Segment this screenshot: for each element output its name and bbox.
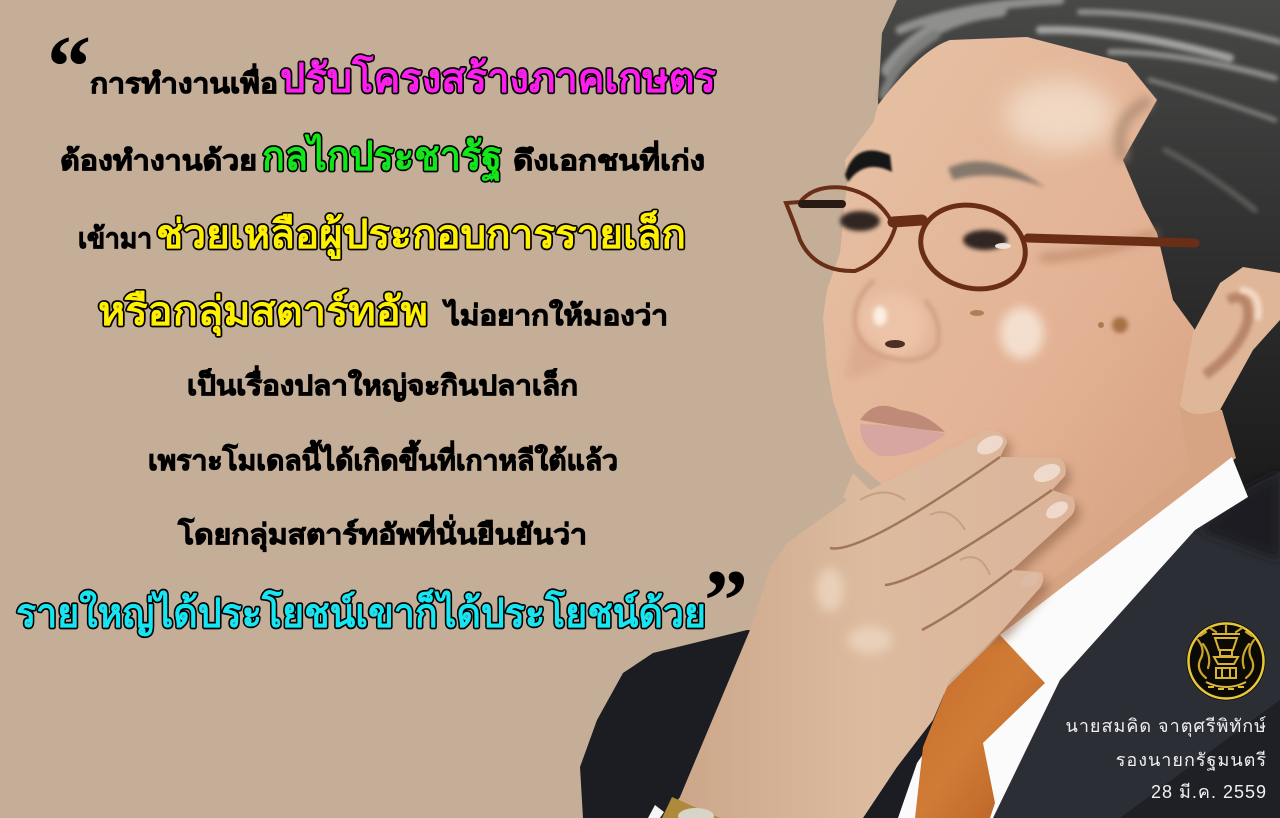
line 4 xyxy=(98,289,668,337)
quote text block xyxy=(16,19,748,650)
necktie xyxy=(915,635,1045,818)
line 1 xyxy=(90,55,717,101)
hand xyxy=(665,430,1075,818)
caption: speaker name, title and date: 28 มี.ค. 2559 xyxy=(1151,782,1267,802)
line 8: รายใหญ่ได้ประโยชน์เขาก็ได้ประโยชน์ด้วย xyxy=(16,588,706,637)
nose outline xyxy=(855,280,939,360)
closing quotation mark: ” xyxy=(704,553,748,650)
glasses xyxy=(786,187,1195,300)
lips xyxy=(860,406,946,456)
hair grey strands xyxy=(884,0,1280,210)
panel: portrait photo xyxy=(580,0,1280,818)
shirt collar xyxy=(898,457,1248,818)
ear xyxy=(1180,267,1280,414)
suit jacket left xyxy=(580,630,1000,818)
suit jacket right xyxy=(990,472,1280,818)
line 4: ไม่อยากให้มองว่า xyxy=(442,299,668,331)
wristwatch xyxy=(648,797,720,818)
finger creases xyxy=(830,457,1052,630)
line 1: การทำงานเพื่อ xyxy=(90,63,278,99)
hair xyxy=(878,0,1280,490)
seal urn xyxy=(1212,634,1240,678)
neck xyxy=(940,400,1236,640)
eyes xyxy=(840,211,1011,250)
fingernails xyxy=(974,432,1071,590)
caption: speaker name, title and date xyxy=(1066,716,1267,802)
line 3: เข้ามา xyxy=(78,223,152,254)
line 5: เป็นเรื่องปลาใหญ่จะกินปลาเล็ก xyxy=(187,365,578,402)
line 7: โดยกลุ่มสตาร์ทอัพที่นั่นยืนยันว่า xyxy=(177,514,587,552)
knuckle highlights xyxy=(816,568,892,654)
caption: speaker name, title and date: นายสมคิด จาตุศรีพิทักษ์ xyxy=(1066,716,1267,737)
face highlights and shadows xyxy=(845,80,1157,380)
line 6: เพราะโมเดลนี้ได้เกิดขึ้นที่เกาหลีใต้แล้ว xyxy=(148,439,618,476)
eyebrows xyxy=(845,150,1046,188)
line 4: หรือกลุ่มสตาร์ทอัพ xyxy=(98,289,428,337)
line 2: ต้องทำงานด้วย xyxy=(60,145,257,176)
line 2 xyxy=(60,133,705,183)
line 2: กลไกประชารัฐ xyxy=(262,133,502,183)
seal lions xyxy=(1198,626,1254,678)
line 3: ช่วยเหลือผู้ประกอบการรายเล็ก xyxy=(156,209,686,259)
caption: speaker name, title and date: รองนายกรัฐมนตรี xyxy=(1116,750,1267,771)
icon: government seal xyxy=(1186,622,1266,700)
line 2: ดึงเอกชนที่เก่ง xyxy=(513,140,705,176)
opening quotation mark: “ xyxy=(47,19,91,116)
line 1: ปรับโครงสร้างภาคเกษตร xyxy=(280,55,717,101)
hand shadow xyxy=(875,437,1080,647)
seal base band xyxy=(1206,682,1246,689)
face xyxy=(823,37,1195,590)
